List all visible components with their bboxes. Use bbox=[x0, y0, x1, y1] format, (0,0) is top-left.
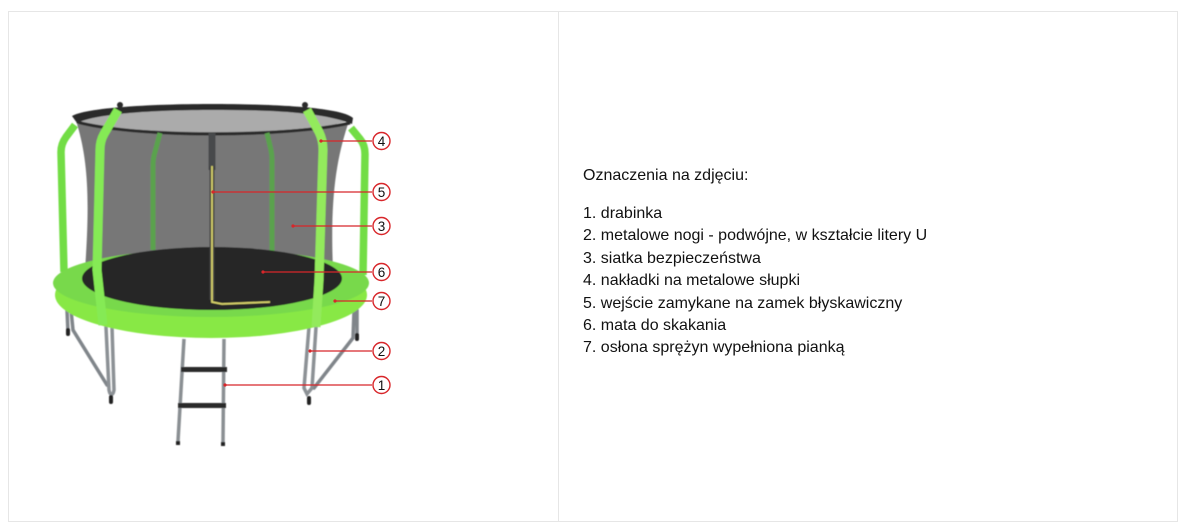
text block: legend list: 4. nakładki na metalowe słupki bbox=[583, 272, 800, 289]
callout 6: jumping mat bbox=[261, 264, 390, 280]
callout 7: spring cover: 7 bbox=[378, 294, 385, 309]
text block: legend list: 1. drabinka bbox=[583, 205, 662, 222]
text block: legend list: Oznaczenia na zdjęciu: bbox=[583, 167, 748, 184]
callout 4: pole covers bbox=[319, 132, 390, 150]
text block: legend list: 7. osłona sprężyn wypełniona pianką bbox=[583, 339, 844, 356]
spring cover pad bbox=[53, 249, 369, 338]
callout 7: spring cover bbox=[333, 292, 390, 310]
callout 4: pole covers: 4 bbox=[378, 134, 386, 149]
callout 1: ladder: 1 bbox=[378, 378, 385, 393]
text block: legend list: 3. siatka bezpieczeństwa bbox=[583, 250, 761, 267]
net back and rim bbox=[72, 104, 353, 270]
callout 3: safety net bbox=[291, 218, 390, 234]
callout 1: ladder bbox=[223, 376, 390, 394]
text block: legend list: 2. metalowe nogi - podwójne, w kształcie litery U bbox=[583, 227, 927, 244]
callout 2: metal legs: 2 bbox=[378, 344, 385, 359]
jumping mat bbox=[82, 247, 342, 310]
entrance zipper bbox=[212, 133, 270, 304]
callout 5: zipper entrance bbox=[211, 184, 390, 200]
callout 5: zipper entrance: 5 bbox=[378, 185, 385, 200]
text block: legend list bbox=[583, 167, 927, 356]
icon: ladder bbox=[176, 339, 227, 446]
front pole covers bbox=[97, 102, 323, 327]
callout 6: jumping mat: 6 bbox=[378, 265, 385, 280]
text block: legend list: 6. mata do skakania bbox=[583, 317, 726, 334]
text block: legend list: 5. wejście zamykane na zamek błyskawiczny bbox=[583, 295, 902, 312]
rear pole covers bbox=[61, 125, 365, 275]
metal legs bbox=[67, 310, 357, 403]
callout 3: safety net: 3 bbox=[378, 219, 385, 234]
callout 2: metal legs bbox=[308, 342, 390, 360]
diagram: trampoline with callouts bbox=[52, 101, 391, 447]
